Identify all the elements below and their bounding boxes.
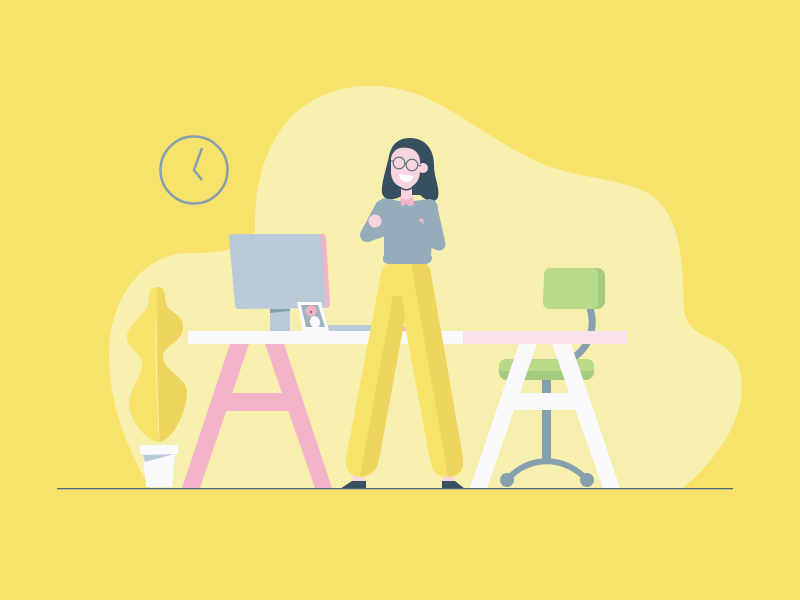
desk top xyxy=(188,331,627,344)
chair backrest xyxy=(551,268,605,309)
bow tie xyxy=(400,197,414,206)
neck xyxy=(401,184,412,200)
monitor xyxy=(229,234,330,332)
chair xyxy=(499,268,605,487)
leaf xyxy=(127,287,158,442)
chair seat xyxy=(499,359,594,380)
ground line xyxy=(57,488,733,489)
glasses xyxy=(391,157,421,171)
chair back support xyxy=(573,308,592,358)
socks xyxy=(353,475,364,482)
background blob xyxy=(109,86,742,488)
sweater xyxy=(367,198,439,264)
potted plant xyxy=(127,287,187,487)
monitor screen xyxy=(229,234,326,309)
pink bit behind trousers xyxy=(400,327,410,331)
person xyxy=(340,138,465,489)
monitor back edge xyxy=(310,234,330,308)
pocket mark xyxy=(418,218,424,224)
monitor stand xyxy=(270,308,290,332)
smile xyxy=(399,174,413,182)
hand xyxy=(368,214,382,228)
desk left legs xyxy=(182,344,332,488)
pot xyxy=(143,454,175,487)
hair xyxy=(382,138,438,201)
wall clock xyxy=(160,136,228,204)
ear xyxy=(418,163,428,173)
shoes xyxy=(340,481,366,489)
chair base xyxy=(507,461,587,480)
photo frame xyxy=(297,302,329,331)
trouser shade xyxy=(360,296,405,476)
right arm xyxy=(430,208,439,244)
trousers xyxy=(346,262,463,477)
keyboard xyxy=(328,325,388,332)
chair column xyxy=(542,378,551,460)
left arm xyxy=(367,207,384,235)
desk right legs xyxy=(470,344,620,488)
face xyxy=(391,148,420,188)
